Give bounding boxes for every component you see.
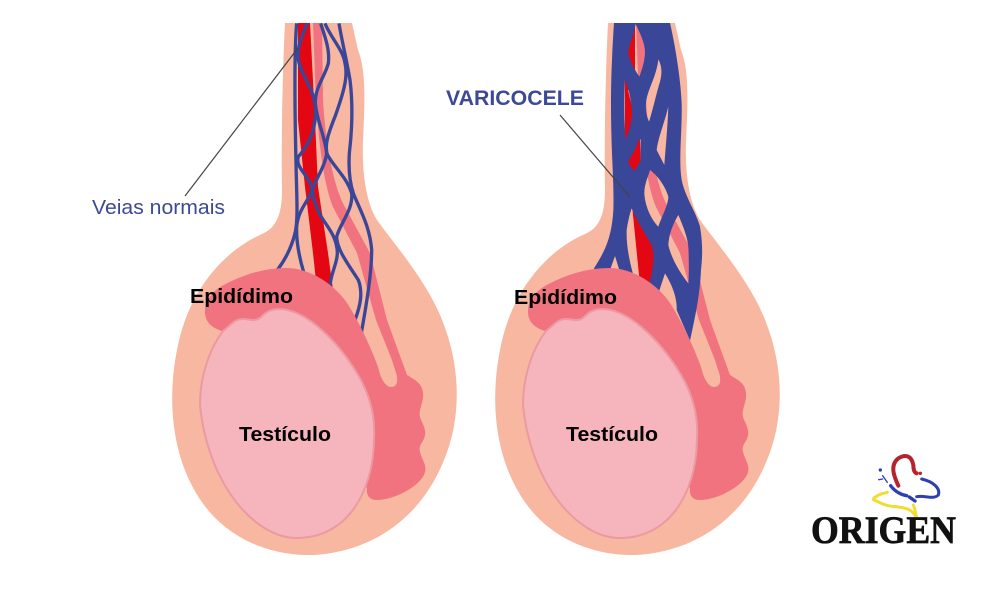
artery	[298, 23, 333, 290]
logo: origen	[811, 456, 956, 552]
scrotum outline	[172, 23, 457, 555]
leader line: varicocele	[560, 115, 630, 197]
logo wordmark: ORIGEN	[811, 509, 956, 552]
label: epididimo right: Epidídimo	[514, 287, 617, 309]
light fade	[495, 300, 780, 555]
normal veins	[277, 23, 372, 337]
epididymis	[528, 268, 748, 500]
vas deferens	[636, 23, 730, 392]
label: veias normais: Veias normais	[92, 197, 225, 219]
leader line: veias normais	[185, 48, 298, 196]
scrotum outline	[495, 23, 780, 555]
label: varicocele: VARICOCELE	[446, 87, 584, 110]
vas deferens	[313, 23, 407, 392]
testicle	[523, 309, 697, 538]
testicle	[200, 309, 374, 538]
label: testiculo left: Testículo	[239, 424, 331, 446]
epididymis	[205, 268, 425, 500]
label: epididimo left: Epidídimo	[190, 286, 293, 308]
label: testiculo right: Testículo	[566, 424, 658, 446]
artery	[625, 23, 656, 295]
dilated veins	[594, 23, 702, 341]
panel: varicocele anatomy	[495, 23, 780, 555]
panel: normal anatomy	[172, 23, 457, 555]
icon: butterfly	[874, 456, 939, 518]
